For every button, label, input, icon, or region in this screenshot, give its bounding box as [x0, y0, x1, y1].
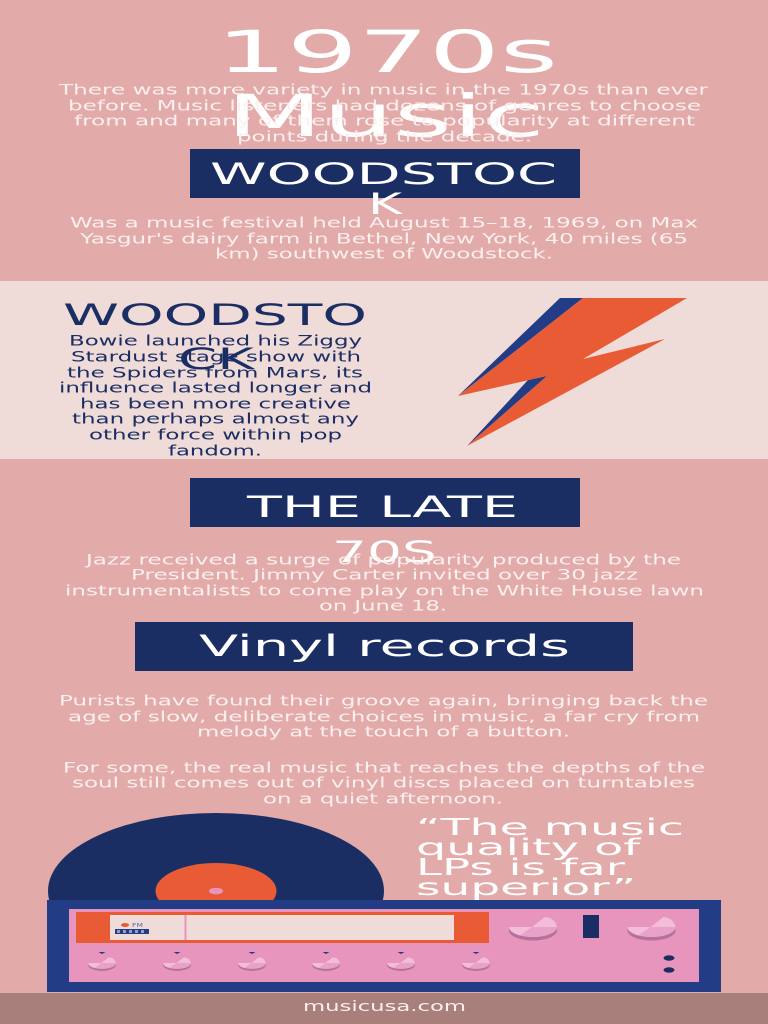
intro text: before. Music listeners had dozens of genres to choose — [68, 98, 701, 114]
display — [76, 912, 489, 943]
heading: woodstock: WOODSTOC — [210, 157, 557, 191]
heading: woodstock: K — [368, 187, 404, 221]
heading: vinyl records: Vinyl records — [199, 629, 570, 663]
late 70s text: on June 18. — [319, 598, 447, 614]
woodstock text: Yasgur's dairy farm in Bethel, New York, 40 miles (65 — [78, 232, 688, 248]
footer: musicusa.com — [303, 999, 466, 1015]
quote: LPs is far — [416, 855, 626, 881]
quote: superior” — [416, 875, 636, 901]
bowie heading — [63, 298, 367, 376]
woodstock text — [70, 216, 698, 262]
late 70s text: President. Jimmy Carter invited over 30 jazz — [131, 568, 638, 584]
vinyl text: on a quiet afternoon. — [263, 792, 503, 808]
heading: the late 70s — [190, 478, 580, 569]
intro text: points during the decade. — [237, 130, 532, 146]
heading: vinyl records — [135, 622, 633, 671]
bowie text: the Spiders from Mars, its — [67, 366, 363, 382]
bowie text: than perhaps almost any — [72, 412, 359, 428]
icon: vinyl record — [48, 813, 384, 969]
heading: the late 70s: THE LATE — [245, 490, 518, 524]
bowie text: Stardust stage show with — [71, 350, 361, 366]
title: 1970s — [216, 18, 558, 86]
bowie text: fandom. — [168, 444, 262, 460]
intro text — [57, 82, 708, 146]
bowie text: other force within pop — [89, 428, 342, 444]
turntable — [47, 900, 721, 992]
late 70s text — [65, 552, 704, 614]
vinyl text: melody at the touch of a button. — [197, 724, 570, 740]
quote: quality of — [416, 835, 642, 861]
late 70s text: Jazz received a surge of popularity produced by the — [84, 552, 681, 568]
bowie text: Bowie launched his Ziggy — [69, 334, 362, 350]
bowie text: has been more creative — [80, 396, 351, 412]
panel: bowie — [0, 281, 768, 460]
heading: the late 70s: 70S — [332, 535, 437, 569]
bowie heading: CK — [178, 342, 256, 376]
quote: “The music — [416, 815, 684, 841]
title: Music — [226, 82, 545, 150]
heading: woodstock — [190, 149, 580, 221]
title — [216, 18, 558, 150]
quote — [416, 815, 684, 901]
footer — [0, 993, 768, 1024]
vinyl text: age of slow, deliberate choices in music, a far cry from — [68, 710, 700, 726]
vinyl text: soul still comes out of vinyl discs placed on turntables — [72, 776, 695, 792]
woodstock text: Was a music festival held August 15–18, 1969, on Max — [70, 216, 698, 232]
vinyl text — [59, 694, 708, 808]
intro text: from and many of them rose to popularity at different — [74, 114, 696, 130]
woodstock text: km) southwest of Woodstock. — [215, 246, 553, 262]
indicator dots — [664, 955, 674, 973]
late 70s text: instrumentalists to come play on the White House lawn — [65, 584, 704, 600]
vinyl text: For some, the real music that reaches the depths of the — [63, 760, 705, 776]
bowie text: influence lasted longer and — [59, 380, 372, 396]
switch — [583, 915, 599, 938]
bowie text — [59, 334, 372, 460]
vinyl text: Purists have found their groove again, bringing back the — [59, 694, 708, 710]
bowie heading: WOODSTO — [63, 298, 367, 332]
large knobs — [509, 917, 676, 940]
display: FM — [132, 923, 143, 929]
icon: lightning bolt — [458, 298, 687, 446]
intro text: There was more variety in music in the 1970s than ever — [57, 82, 708, 98]
small knobs — [88, 952, 490, 971]
